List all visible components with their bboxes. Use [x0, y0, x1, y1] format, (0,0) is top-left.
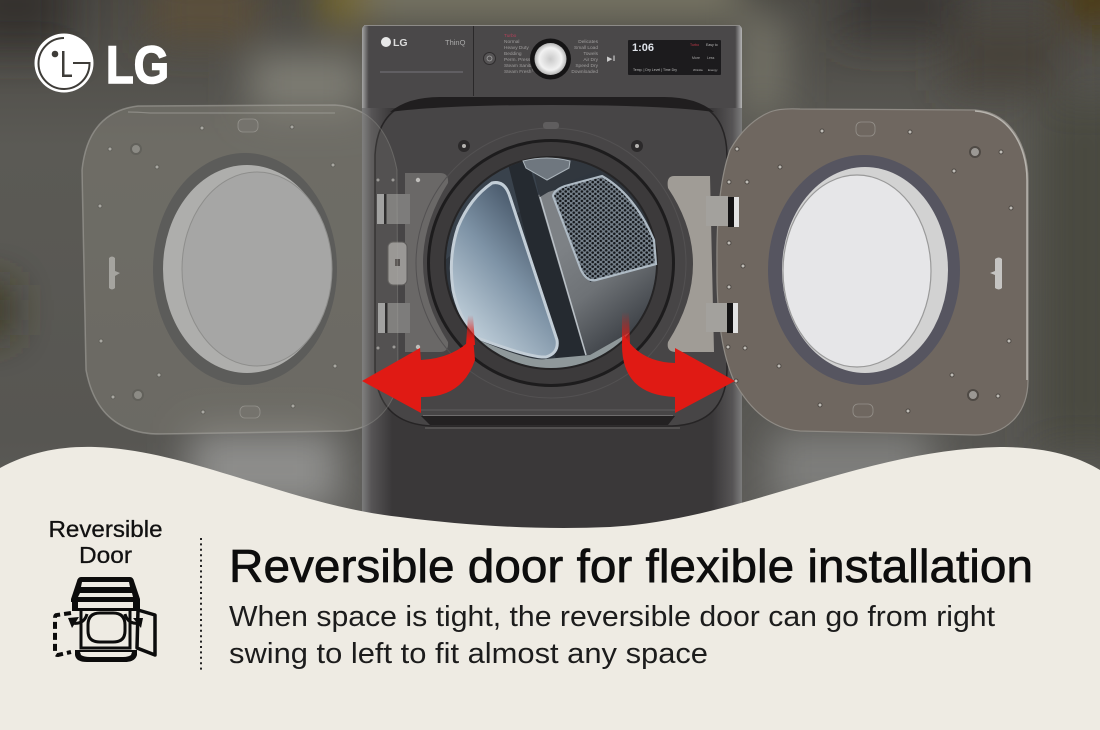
left door panel: [81, 104, 362, 435]
cycle labels right: Small Load: [574, 45, 598, 51]
drum gasket: [416, 128, 686, 398]
right door catch: [990, 258, 1002, 290]
cycle dial: [530, 38, 571, 80]
icon washer base: [75, 650, 137, 662]
lower door trim: [421, 410, 680, 428]
left door (transparent): [82, 105, 398, 434]
display: Easy to: [706, 43, 718, 47]
cycle labels left: Steam Sanitary™: [504, 63, 542, 69]
drum upper right shade: [540, 192, 549, 197]
icon: reversible door: [55, 577, 155, 662]
cycle labels left: [504, 33, 542, 75]
door frame recess: [375, 97, 727, 426]
description: [229, 601, 995, 670]
display: More: [692, 56, 700, 60]
dotted divider: [200, 538, 202, 673]
left door overlap on dryer: [362, 112, 398, 428]
icon left arrow: [68, 614, 87, 628]
door latch: [388, 242, 407, 285]
display: Less: [707, 56, 715, 60]
description: swing to left to fit almost any space: [229, 638, 708, 670]
left door screws: [98, 125, 337, 414]
hinge plate right: [668, 176, 714, 352]
cream wave panel: [0, 447, 1100, 730]
cycle labels right: Towels: [583, 51, 599, 57]
hinge plate left: [405, 173, 448, 352]
display: Temp. | Dry Level | Time Dry: [633, 68, 677, 72]
display: Wrinkle: [693, 68, 703, 72]
drum paddle: [451, 183, 557, 357]
right red arrow: [622, 312, 735, 413]
display: Turbo: [690, 43, 699, 47]
logo text: LG: [106, 36, 169, 95]
panel brand: [380, 37, 466, 72]
feature label: Reversible: [48, 516, 162, 542]
icon right arrow: [125, 614, 143, 628]
drum sensor: [523, 158, 570, 180]
drum interior: [445, 155, 660, 380]
cycle labels left: Steam Fresh™: [504, 69, 536, 75]
panel brand: ThinQ: [445, 38, 466, 47]
icon right door: [137, 610, 155, 655]
control panel: [362, 25, 742, 108]
cycle labels right: Delicates: [578, 39, 599, 45]
cycle labels right: Downloaded: [571, 69, 598, 75]
cycle labels right: [571, 39, 599, 75]
power button: [484, 52, 496, 64]
drum bottom rim: [480, 332, 630, 368]
right door hinges: [706, 196, 739, 333]
icon drum: [88, 613, 125, 642]
drum top-left shade: [446, 167, 538, 259]
lint filter: [553, 176, 656, 280]
display: Energy: [708, 68, 718, 72]
right door: [706, 109, 1028, 435]
feature label: Door: [79, 542, 132, 568]
left door window: [163, 165, 331, 373]
panel brand: LG: [393, 37, 408, 49]
cycle labels left: Turbo: [504, 33, 517, 39]
right door rim highlight: [975, 111, 1027, 380]
icon washer body: [72, 602, 140, 611]
description: When space is tight, the reversible door can go from right: [229, 601, 995, 633]
left red arrow: [362, 315, 475, 413]
right door ring: [768, 155, 960, 385]
left door catch: [109, 256, 120, 290]
logo mark: [34, 34, 94, 92]
display: [628, 40, 721, 75]
icon dashed door: [55, 613, 71, 655]
cycle labels left: Heavy Duty: [504, 45, 529, 51]
LG logo: [34, 34, 169, 95]
display: 1:06: [632, 42, 654, 54]
feature label: [48, 516, 162, 568]
headline: Reversible door for flexible installation: [229, 540, 1033, 592]
left door notches: [238, 119, 258, 132]
cycle labels right: Speed Dry: [575, 63, 599, 69]
icon washer top: [71, 577, 140, 602]
cycle labels left: Perm. Press: [504, 57, 531, 63]
hinges left: [377, 194, 410, 333]
right door window: [782, 167, 948, 373]
cycle labels right: Air Dry: [583, 57, 599, 63]
left door ring: [153, 153, 337, 385]
start button: ▶‖: [607, 56, 615, 63]
cycle labels left: Bedding: [504, 51, 522, 57]
frame screws: [376, 140, 643, 350]
right door screws: [726, 129, 1013, 413]
dryer body: [362, 100, 742, 530]
cycle labels left: Normal: [504, 39, 519, 45]
drum rib: [508, 162, 585, 358]
drum right sector: [538, 190, 656, 356]
dryer: [362, 25, 742, 530]
right door notches: [856, 122, 875, 136]
